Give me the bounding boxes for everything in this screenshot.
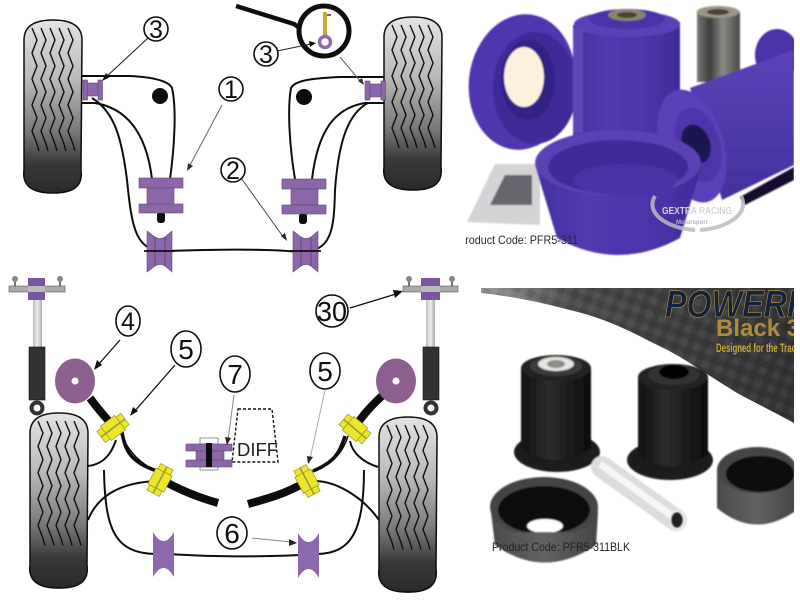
yellow clamp lower left	[145, 463, 175, 497]
product code: Product Code: PFR5-311	[458, 233, 578, 247]
photo: open purple cup	[468, 13, 574, 151]
watermark text	[662, 207, 732, 226]
label 5 left: 5	[178, 334, 194, 365]
label 2	[221, 157, 245, 185]
carbon banner	[481, 288, 794, 423]
arrows: lower diagram	[94, 290, 403, 546]
watermark ring	[652, 196, 743, 230]
label 4: 4	[121, 308, 135, 336]
left wishbone arm	[82, 76, 175, 251]
bush 2 right	[290, 231, 321, 272]
DIFF label: DIFF	[237, 439, 278, 460]
bush 1 left	[139, 178, 183, 223]
right wishbone arm	[289, 77, 384, 252]
bush 7	[186, 438, 232, 470]
panel: lower suspension diagram	[9, 276, 458, 592]
label 5 right	[310, 353, 340, 389]
icon: right rear tyre	[379, 417, 437, 592]
photo: metal sleeve	[600, 464, 685, 530]
bush: right outer	[365, 81, 386, 100]
pivot dot right	[296, 89, 312, 105]
right trailing arm	[248, 395, 383, 504]
yellow clamp upper left	[96, 412, 130, 444]
thin suspension links	[88, 440, 379, 556]
label 1: 1	[224, 76, 238, 104]
photo: black bush A	[514, 355, 600, 472]
label 4	[116, 306, 140, 336]
left strut	[9, 276, 65, 414]
label 7	[220, 356, 250, 392]
photo: lying purple bush	[657, 28, 794, 206]
panel: black bush product photo	[481, 284, 800, 562]
icon: left front tyre	[24, 20, 82, 193]
yellow clamp lower right	[292, 464, 322, 498]
photo: black cup D	[717, 447, 797, 525]
label 3: 3	[149, 16, 163, 44]
panel: purple bush product photo	[458, 6, 799, 255]
photo: instruction card	[467, 164, 540, 225]
icon: right front tyre	[384, 17, 442, 190]
label 5 left	[171, 331, 201, 367]
right strut	[403, 276, 458, 414]
left trailing arm	[90, 398, 218, 503]
photo: metal sleeve	[696, 6, 740, 82]
bush 6 left	[153, 532, 174, 577]
pivot dot left	[152, 88, 168, 104]
photo: black bush B	[627, 364, 713, 480]
panel: upper suspension diagram	[24, 6, 442, 272]
connecting cross member	[165, 250, 300, 252]
bush: left outer	[83, 80, 102, 100]
label 6: 6	[224, 518, 240, 549]
label 30: 30	[317, 296, 347, 327]
label 5 right: 5	[317, 356, 333, 387]
disc bush right	[376, 358, 416, 404]
yellow clamp upper right	[338, 412, 372, 446]
watermark text: Motorsport	[676, 220, 708, 226]
icon: left rear tyre	[30, 413, 88, 588]
label 3	[144, 16, 168, 44]
differential outline	[232, 409, 278, 462]
icon: magnifier	[236, 6, 349, 56]
label 2: 2	[226, 157, 240, 185]
tagline: Designed for the Track	[716, 343, 800, 356]
photo: tall purple bush	[573, 9, 680, 135]
bush 1 right	[282, 179, 326, 224]
watermark text: GEXTRA RACING	[662, 205, 732, 217]
bush 6 right	[298, 533, 319, 578]
label 6	[217, 517, 247, 549]
photo: front purple cup	[535, 130, 702, 255]
label 7: 7	[227, 359, 243, 390]
arrows: upper diagram	[102, 38, 364, 241]
bush 2 left	[144, 231, 175, 272]
logo: Black 3: Black 3	[716, 315, 800, 342]
photo: black cup C	[490, 477, 598, 562]
disc bush left	[55, 358, 95, 404]
label 3 magnified	[254, 41, 278, 69]
product code: Product Code: PFR5-311BLK	[492, 540, 630, 554]
label 3 magnified: 3	[259, 41, 273, 69]
label 1	[219, 76, 243, 104]
